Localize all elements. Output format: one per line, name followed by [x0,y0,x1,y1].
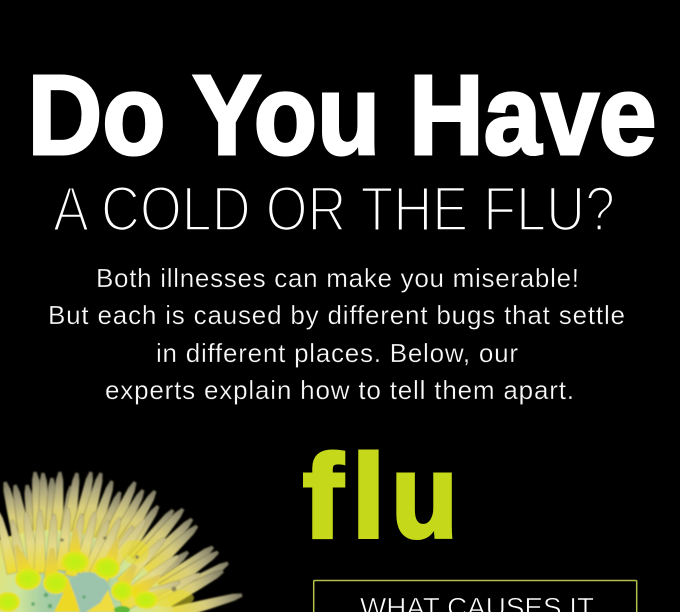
core patch [66,572,110,612]
flu heading [303,431,458,563]
intro text: But each is caused by different bugs that settle [48,300,625,330]
intro text: in different places. Below, our [156,338,518,368]
flu heading: u [392,431,458,563]
box: what causes it [314,580,637,612]
flu heading: l [352,431,385,563]
flu heading: f [303,431,344,563]
intro text: Both illnesses can make you miserable! [96,263,579,293]
intro text [48,263,625,405]
icon: flu virus [0,471,244,612]
intro text: experts explain how to tell them apart. [105,375,574,405]
